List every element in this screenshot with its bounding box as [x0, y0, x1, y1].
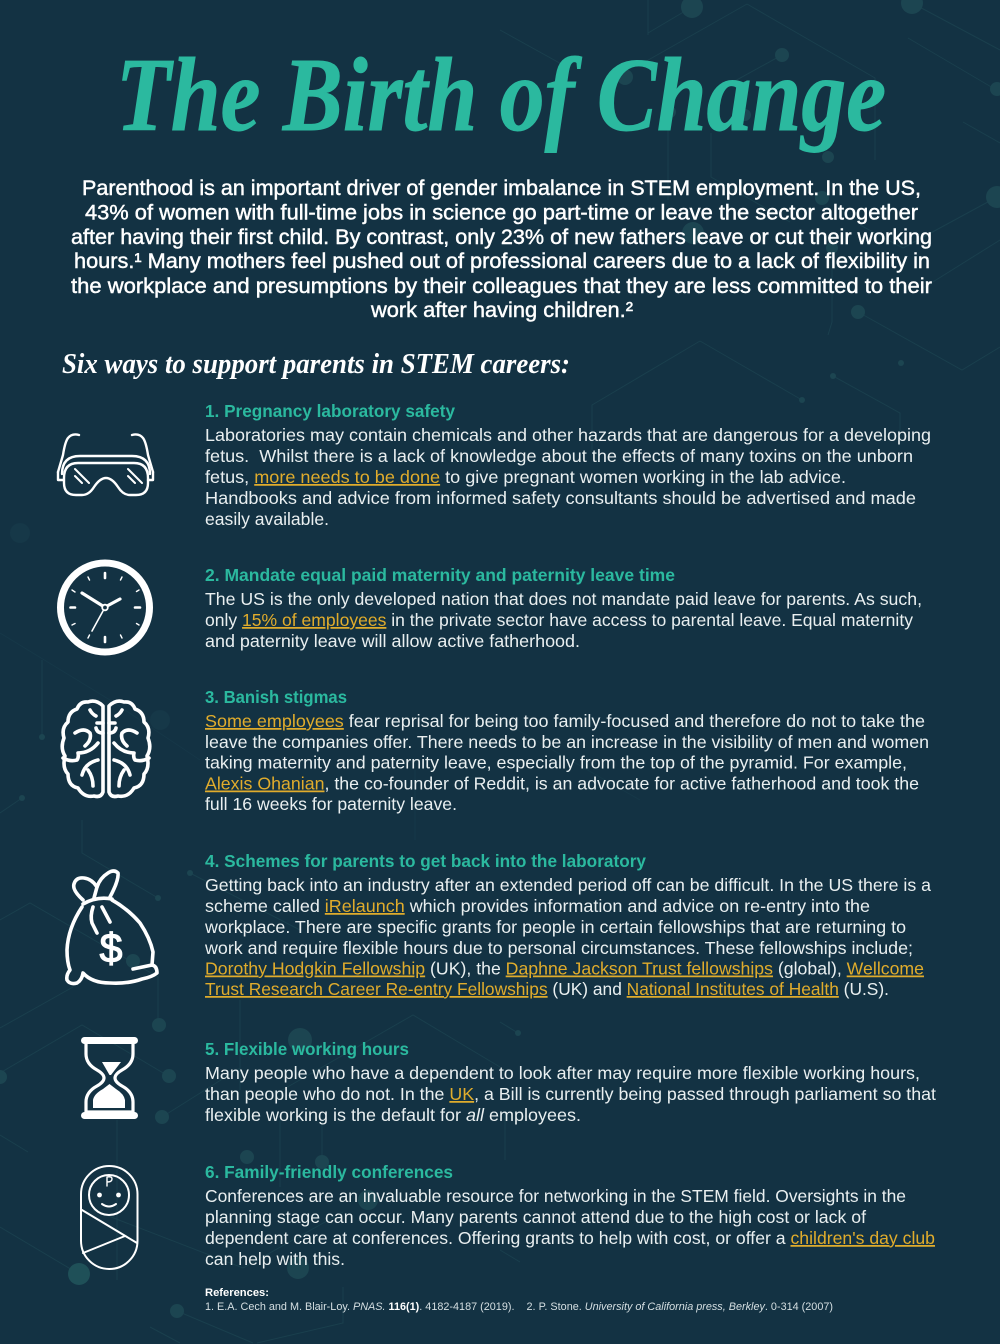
heading: 5. Flexible working hours: [205, 1039, 409, 1059]
body text: work and require flexible hours due to personal circumstances. These fellowships include;: [204, 938, 913, 958]
heading: 3. Banish stigmas: [205, 687, 347, 707]
body text: than people who do not. In the UK, a Bill is currently being passed through parliament so that: [205, 1084, 936, 1104]
references: [205, 1287, 833, 1313]
body text: [205, 711, 929, 814]
body text: and paternity leave will allow active fatherhood.: [205, 631, 580, 651]
body text: [205, 1186, 935, 1269]
panel: 6 family-friendly conferences: [81, 1162, 935, 1269]
intro paragraph: work after having children.²: [370, 299, 633, 322]
dollar sign: $: [100, 925, 123, 971]
intro paragraph: the workplace and presumptions by their colleagues that they are less committed to their: [71, 275, 932, 298]
body text: [204, 875, 931, 999]
body text: Alexis Ohanian, the co-founder of Reddit, is an advocate for active fatherhood and took the: [205, 774, 919, 794]
body text: scheme called iRelaunch which provides information and advice on re-entry into the: [205, 896, 870, 916]
intro paragraph: after having their first child. By contrast, only 23% of new fathers leave or cut their working: [71, 226, 932, 249]
body text: dependent care at conferences. Offering grants to help with cost, or offer a children's day club: [205, 1228, 935, 1248]
body text: Trust Research Career Re-entry Fellowships (UK) and National Institutes of Health (U.S).: [205, 979, 889, 999]
body text: fetus, more needs to be done to give pregnant women working in the lab advice.: [205, 467, 846, 487]
body text: [205, 425, 931, 529]
body text: [205, 589, 922, 651]
panel: 2 equal paid leave: [60, 563, 922, 652]
body text: full 16 weeks for paternity leave.: [205, 794, 457, 814]
body text: flexible working is the default for all employees.: [205, 1105, 581, 1125]
body text: planning stage can occur. Many parents cannot attend due to the high cost or lack of: [205, 1207, 866, 1227]
icon: swaddled baby: [81, 1166, 138, 1269]
panel: 1 pregnancy laboratory safety: [58, 401, 931, 529]
panel: 3 banish stigmas: [62, 687, 929, 814]
body text: leave the companies offer. There needs to be an increase in the visibility of men and women: [205, 732, 929, 752]
heading: 4. Schemes for parents to get back into the laboratory: [205, 851, 646, 871]
body text: Some employees fear reprisal for being too family-focused and therefore do not to take the: [205, 711, 925, 731]
body text: Conferences are an invaluable resource for networking in the STEM field. Oversights in the: [205, 1186, 906, 1206]
section heading: Six ways to support parents in STEM careers:: [62, 348, 570, 380]
icon: clock: [60, 563, 150, 652]
intro paragraph: 43% of women with full-time jobs in science go part-time or leave the sector altogether: [85, 202, 918, 224]
body text: The US is the only developed nation that does not mandate paid leave for parents. As such,: [205, 589, 922, 609]
intro paragraph: hours.¹ Many mothers feel pushed out of professional careers due to a lack of flexibility in: [74, 250, 930, 273]
heading: 2. Mandate equal paid maternity and paternity leave time: [205, 565, 675, 585]
body text: workplace. There are specific grants for people in certain fellowships that are returning to: [204, 917, 906, 937]
body text: Many people who have a dependent to look after may require more flexible working hours,: [205, 1063, 920, 1083]
icon: hourglass: [81, 1037, 138, 1119]
body text: Getting back into an industry after an extended period off can be difficult. In the US there is a: [205, 875, 931, 895]
intro paragraph: [71, 177, 932, 322]
icon: brain: [62, 701, 150, 796]
panel: 4 schemes to return: [67, 851, 931, 999]
heading: 6. Family-friendly conferences: [205, 1162, 453, 1182]
heading: 1. Pregnancy laboratory safety: [205, 401, 455, 421]
panel: 5 flexible working hours: [81, 1037, 936, 1125]
icon: money bag: [67, 871, 157, 984]
body text: can help with this.: [205, 1249, 345, 1269]
intro paragraph: Parenthood is an important driver of gender imbalance in STEM employment. In the US,: [82, 177, 921, 200]
body text: Handbooks and advice from informed safety consultants should be advertised and made: [205, 488, 916, 508]
references: References:: [205, 1287, 269, 1299]
references: 1. E.A. Cech and M. Blair-Loy. PNAS. 116(1). 4182-4187 (2019). 2. P. Stone. University of California press, Berkley. 0-314 (2007): [205, 1301, 833, 1313]
icon: safety goggles: [58, 434, 153, 495]
body text: Laboratories may contain chemicals and other hazards that are dangerous for a developing: [205, 425, 931, 445]
body text: Dorothy Hodgkin Fellowship (UK), the Daphne Jackson Trust fellowships (global), Wellcome: [205, 958, 924, 978]
title: The Birth of Change: [116, 36, 886, 153]
body text: fetus. Whilst there is a lack of knowledge about the effects of many toxins on the unborn: [205, 446, 913, 466]
body text: easily available.: [205, 509, 329, 529]
body text: only 15% of employees in the private sector have access to parental leave. Equal maternity: [205, 610, 913, 630]
body text: [205, 1063, 936, 1125]
body text: taking maternity and paternity leave, especially from the top of the pyramid. For example,: [205, 752, 907, 772]
